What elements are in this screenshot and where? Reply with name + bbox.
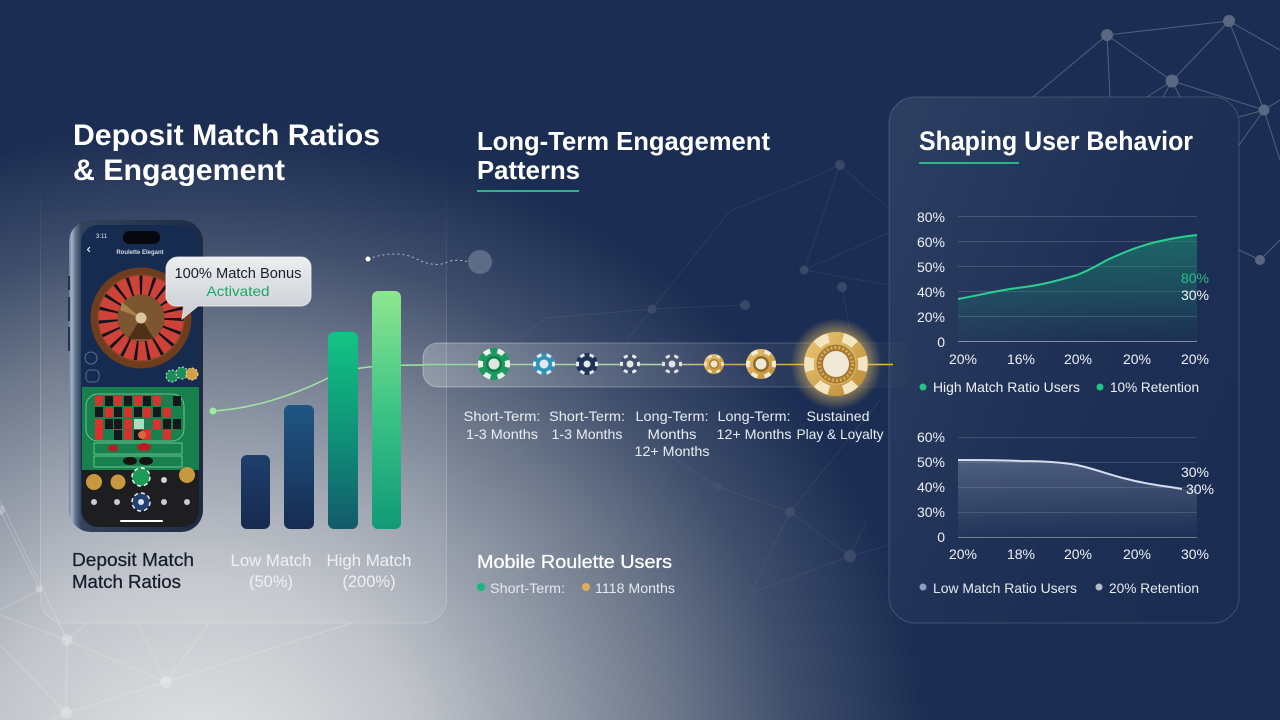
- mobile roulette users legend: Mobile Roulette Users: [477, 551, 672, 572]
- callout: match bonus: Activated: [206, 283, 270, 299]
- label: high match: [326, 552, 412, 591]
- timeline labels: 1-3 Months: [466, 426, 538, 442]
- legend: 10% Retention: [1110, 379, 1199, 395]
- chip: teal: [533, 353, 555, 375]
- callout: match bonus: 100% Match Bonus: [174, 266, 302, 282]
- y axis labels: 60%: [917, 429, 945, 445]
- timeline labels: Long-Term:: [636, 408, 708, 424]
- x axis labels: 20%: [1064, 546, 1092, 562]
- mobile roulette users legend: [477, 551, 675, 596]
- chart: high match ratio retention: [917, 209, 1209, 395]
- dashed connector with node: [366, 250, 492, 274]
- end labels: [1181, 464, 1214, 497]
- x axis labels: 20%: [1123, 351, 1151, 367]
- title: long-term engagement patterns: Patterns: [477, 155, 580, 185]
- end labels: 30%: [1186, 481, 1214, 497]
- timeline labels: Months: [648, 426, 696, 442]
- roulette wheel: [90, 268, 192, 368]
- label: deposit match ratios: [72, 550, 194, 592]
- chip: medium gold: [746, 349, 776, 379]
- label: low match: Low Match: [230, 552, 312, 570]
- chip: small gold: [704, 354, 724, 374]
- legend: Low Match Ratio Users: [933, 580, 1077, 596]
- chip: navy: [576, 353, 598, 375]
- y axis labels: [917, 209, 945, 350]
- x axis labels: 16%: [1007, 351, 1035, 367]
- roulette table: [86, 394, 184, 467]
- title: deposit match ratios: & Engagement: [73, 154, 285, 187]
- panel: shaping user behavior: [889, 97, 1239, 623]
- y axis labels: 0: [937, 334, 945, 350]
- timeline labels: Short-Term:: [464, 408, 540, 424]
- mobile roulette users legend: Short-Term:: [490, 580, 565, 596]
- y axis labels: 30%: [917, 504, 945, 520]
- chip: slate: [620, 354, 640, 374]
- timeline labels: Play & Loyalty: [796, 426, 884, 442]
- phone chips: [86, 367, 198, 511]
- phone screen: Roulette Elegant: [116, 250, 164, 256]
- x axis labels: 18%: [1007, 546, 1035, 562]
- network pattern: bottom left: [0, 500, 352, 720]
- title: shaping user behavior: Shaping User Behavior: [919, 126, 1193, 156]
- phone: [68, 220, 203, 532]
- timeline labels: Sustained: [806, 408, 870, 424]
- end labels: 30%: [1181, 464, 1209, 480]
- y axis labels: [917, 429, 945, 545]
- growth curve from phone to timeline: [210, 365, 423, 414]
- label: deposit match ratios: Deposit Match: [72, 550, 194, 570]
- end labels: [1181, 270, 1209, 303]
- end labels: 80%: [1181, 270, 1209, 286]
- x axis labels: [949, 546, 1209, 562]
- bar chart: match levels: [241, 291, 401, 529]
- phone screen: [81, 225, 199, 527]
- phone screen: 3:11: [96, 234, 108, 240]
- y axis labels: 40%: [917, 479, 945, 495]
- x axis labels: 20%: [1123, 546, 1151, 562]
- x axis labels: 20%: [1064, 351, 1092, 367]
- title: deposit match ratios: Deposit Match Ratios: [73, 119, 380, 152]
- title: long-term engagement patterns: Long-Term Engagement: [477, 126, 770, 156]
- y axis labels: 40%: [917, 284, 945, 300]
- chip: green: [478, 348, 510, 380]
- chip: large glowing gold: [790, 318, 882, 410]
- callout: match bonus: [166, 257, 311, 319]
- legend: 20% Retention: [1109, 580, 1199, 596]
- timeline labels: Short-Term:: [549, 408, 625, 424]
- chip: grey: [662, 354, 682, 374]
- y axis labels: 50%: [917, 259, 945, 275]
- label: low match: (50%): [249, 573, 293, 591]
- legend: [920, 379, 1199, 395]
- label: deposit match ratios: Match Ratios: [72, 572, 181, 592]
- y axis labels: 20%: [917, 309, 945, 325]
- title: long-term engagement patterns: [477, 126, 770, 192]
- legend: [920, 580, 1199, 596]
- label: high match: High Match: [326, 552, 412, 570]
- legend: High Match Ratio Users: [933, 379, 1080, 395]
- mobile roulette users legend: 1118 Months: [595, 580, 675, 596]
- y axis labels: 80%: [917, 209, 945, 225]
- x axis labels: 20%: [1181, 351, 1209, 367]
- y axis labels: 50%: [917, 454, 945, 470]
- timeline labels: 1-3 Months: [552, 426, 622, 442]
- chip timeline: [478, 318, 882, 410]
- timeline line: [423, 364, 893, 366]
- x axis labels: 30%: [1181, 546, 1209, 562]
- timeline labels: Long-Term:: [718, 408, 790, 424]
- end labels: 30%: [1181, 287, 1209, 303]
- chart: low match ratio retention: [917, 429, 1214, 596]
- timeline labels: 12+ Months: [634, 443, 710, 459]
- y axis labels: 60%: [917, 234, 945, 250]
- panel: deposit match: [40, 170, 446, 623]
- label: low match: [230, 552, 312, 591]
- network pattern: top right: [1033, 15, 1280, 265]
- y axis labels: 0: [937, 529, 945, 545]
- timeline labels: [464, 408, 884, 459]
- network pattern: middle: [450, 160, 925, 599]
- x axis labels: [949, 351, 1209, 367]
- label: high match: (200%): [342, 573, 396, 591]
- timeline band: [423, 343, 913, 387]
- x axis labels: 20%: [949, 351, 977, 367]
- x axis labels: 20%: [949, 546, 977, 562]
- timeline labels: 12+ Months: [716, 426, 792, 442]
